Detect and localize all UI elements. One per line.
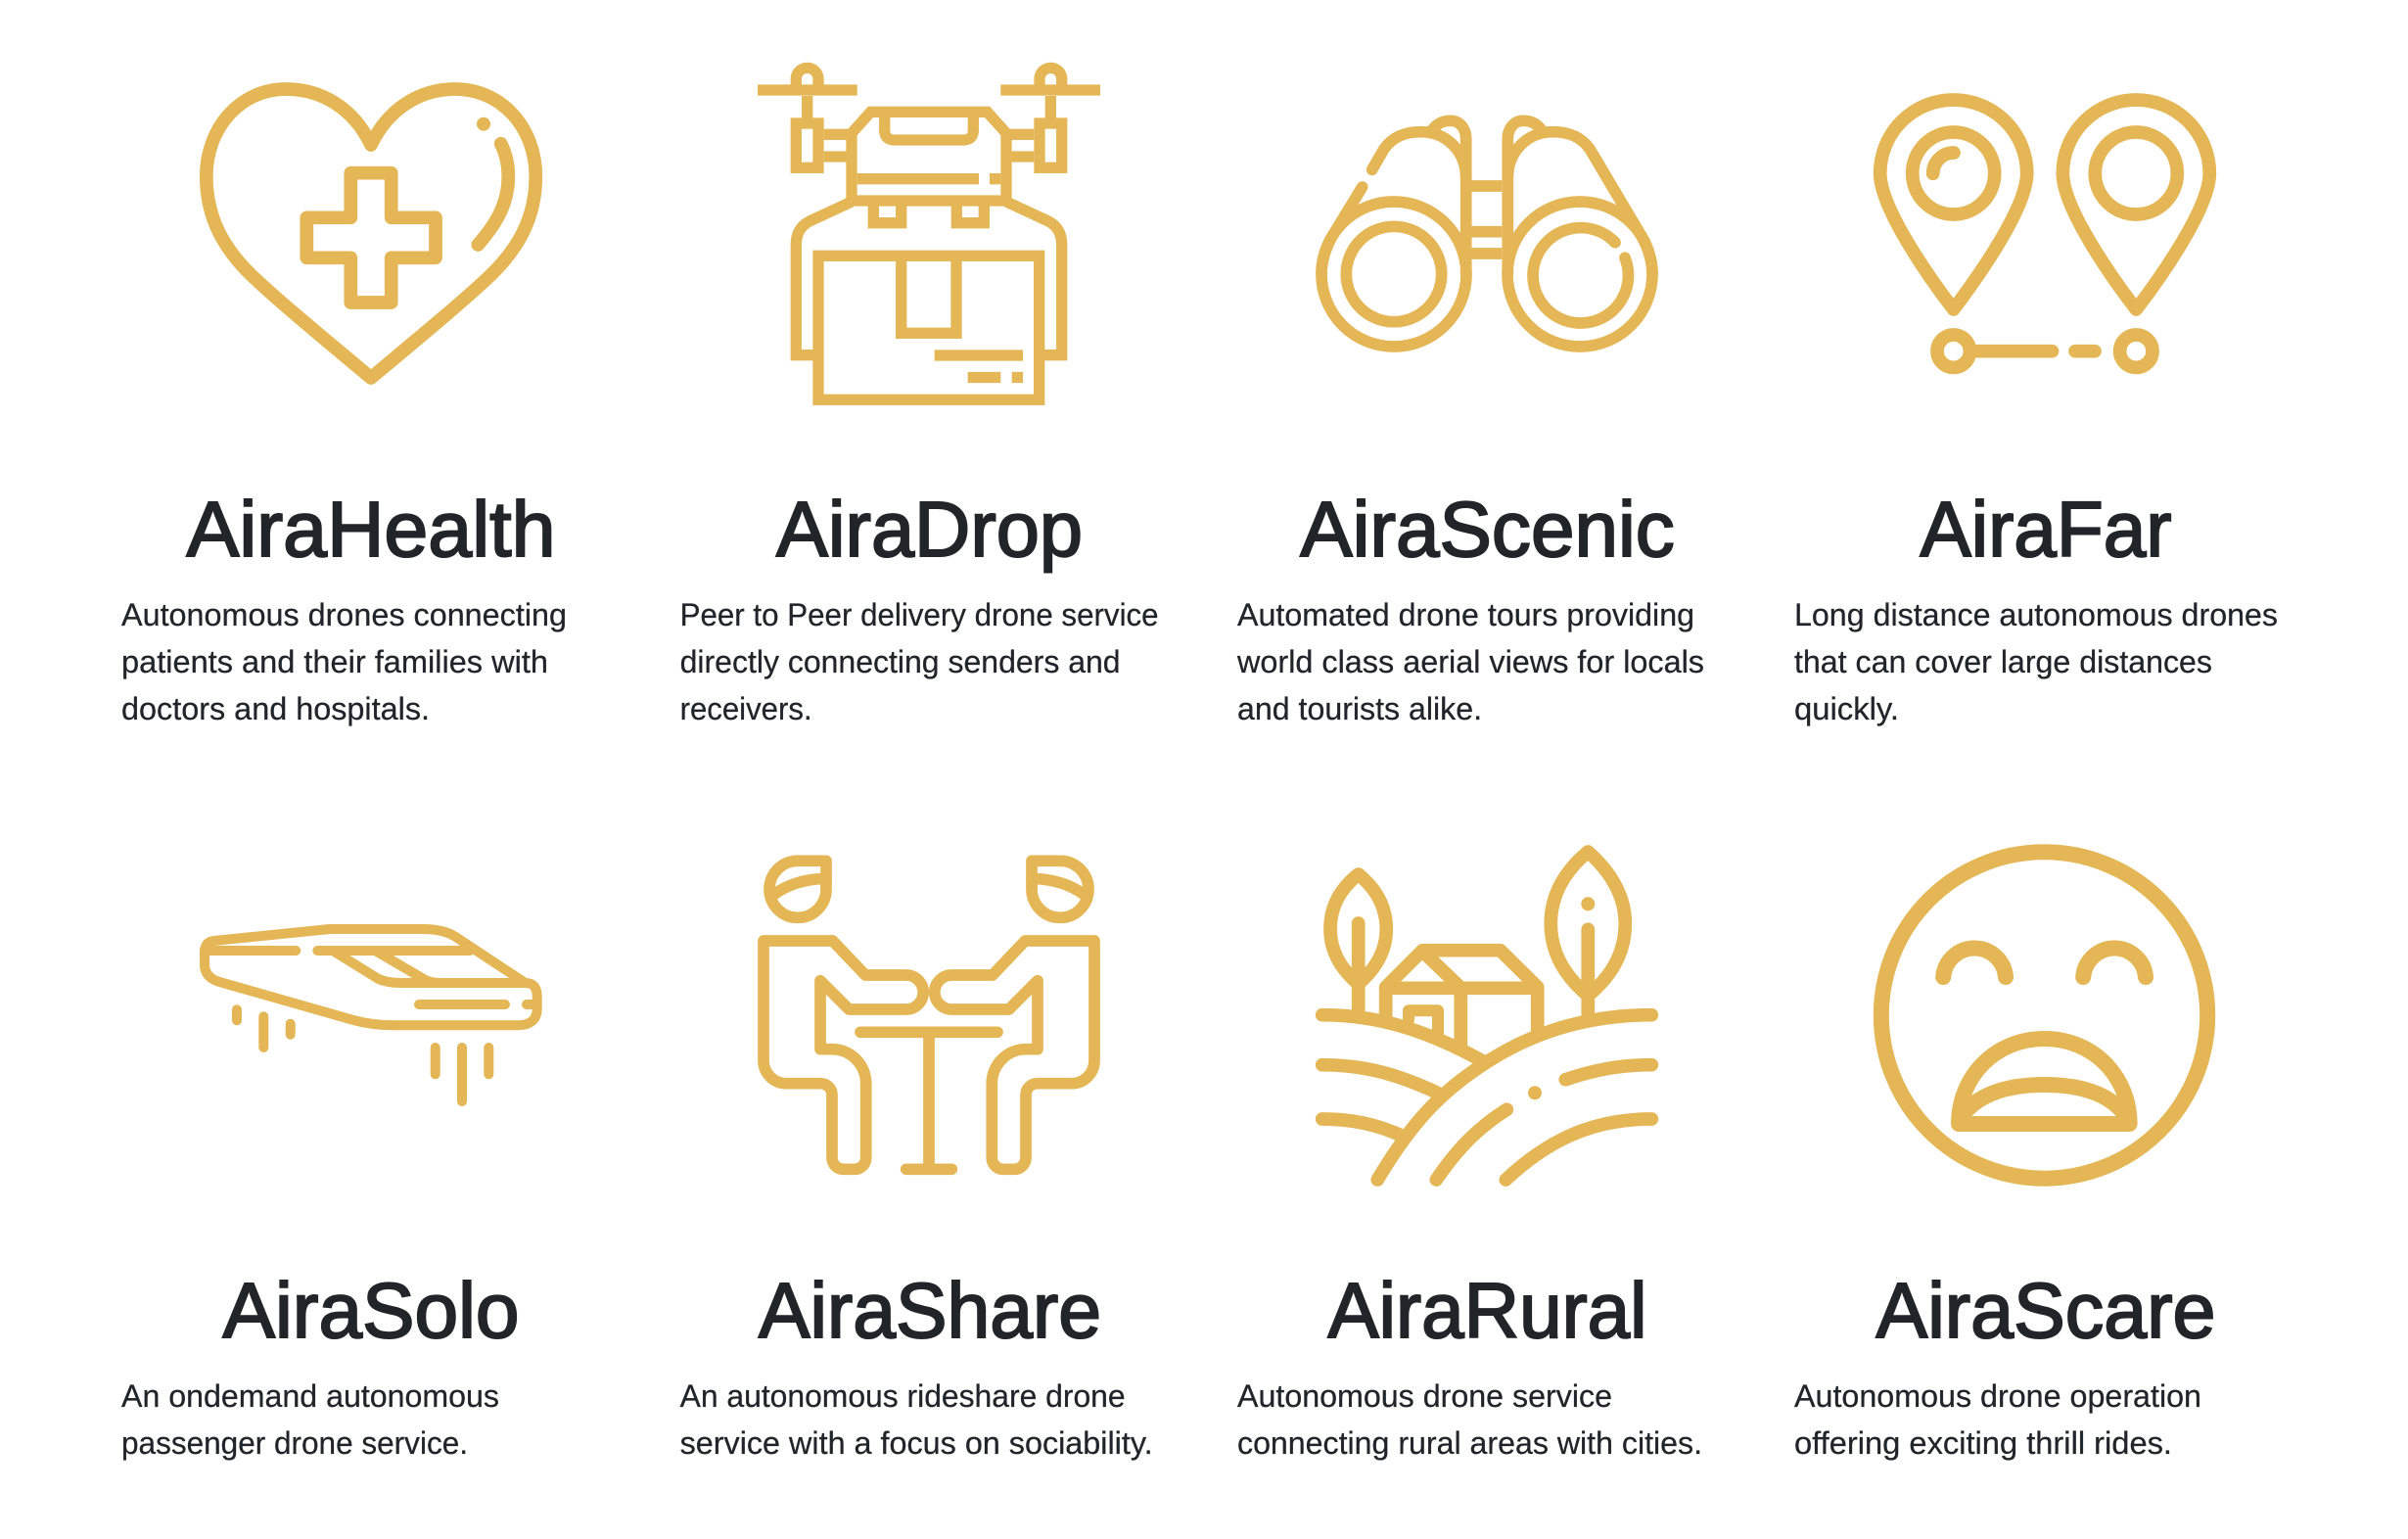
description: AiraRural	[1237, 1378, 1702, 1461]
icon: delivery drone with parcel	[758, 68, 1100, 399]
heading: AiraRural: AiraRural	[1327, 1267, 1646, 1354]
heading: AiraSolo: AiraSolo	[223, 1267, 519, 1354]
description: AiraScare	[1794, 1378, 2201, 1461]
card: AiraScenic	[1236, 120, 1704, 726]
icon: scared face	[1881, 852, 2207, 1179]
description: AiraHealth: patients and their families with	[121, 644, 548, 679]
description: AiraScenic: Automated drone tours providing	[1237, 597, 1694, 632]
heading: AiraHealth: AiraHealth	[186, 486, 556, 573]
description: AiraShare	[680, 1378, 1153, 1461]
heading: AiraScare: AiraScare	[1875, 1267, 2216, 1354]
description: AiraFar	[1794, 597, 2278, 726]
icon: two map pins and route	[1880, 100, 2209, 367]
description: AiraScenic	[1236, 597, 1704, 726]
description: AiraHealth: doctors and hospitals.	[121, 691, 430, 726]
icon: farmhouse, trees and fields	[1322, 852, 1651, 1180]
card: AiraFar	[1794, 100, 2278, 726]
description: AiraScenic: world class aerial views for locals	[1236, 644, 1704, 679]
heading: AiraScenic: AiraScenic	[1300, 486, 1675, 573]
description: AiraSolo: passenger drone service.	[121, 1425, 468, 1461]
description: AiraScenic: and tourists alike.	[1237, 691, 1482, 726]
description: AiraDrop: receivers.	[680, 691, 812, 726]
heading: AiraDrop: AiraDrop	[776, 486, 1083, 573]
heading: AiraShare: AiraShare	[759, 1267, 1101, 1354]
description: AiraRural: Autonomous drone service	[1237, 1378, 1612, 1414]
icon: heart with medical cross	[207, 89, 535, 378]
card: AiraScare	[1794, 852, 2216, 1461]
heading: AiraFar: AiraFar	[1921, 486, 2171, 573]
card: AiraDrop	[680, 68, 1159, 726]
description: AiraDrop: Peer to Peer delivery drone service	[680, 597, 1159, 632]
description: AiraHealth	[121, 597, 567, 726]
card: AiraHealth	[121, 89, 567, 726]
description: AiraFar: Long distance autonomous drones	[1794, 597, 2278, 632]
description: AiraShare: service with a focus on sociability.	[680, 1425, 1153, 1461]
description: AiraDrop	[680, 597, 1159, 726]
description: AiraScare: offering exciting thrill rides.	[1794, 1425, 2172, 1461]
description: AiraFar: quickly.	[1794, 691, 1899, 726]
description: AiraFar: that can cover large distances	[1794, 644, 2212, 679]
icon: two people sharing a table	[764, 861, 1094, 1169]
card: AiraSolo	[121, 929, 537, 1461]
description: AiraSolo: An ondemand autonomous	[121, 1378, 499, 1414]
description: AiraDrop: directly connecting senders and	[680, 644, 1121, 679]
description: AiraHealth: Autonomous drones connecting	[121, 597, 567, 632]
description: AiraRural: connecting rural areas with cities.	[1237, 1425, 1702, 1461]
description: AiraScare: Autonomous drone operation	[1794, 1378, 2201, 1414]
description: AiraSolo	[121, 1378, 499, 1461]
card: AiraShare	[680, 861, 1153, 1461]
icon: hovering passenger drone	[205, 929, 537, 1101]
icon: binoculars	[1321, 120, 1652, 347]
card: AiraRural	[1237, 852, 1702, 1461]
description: AiraShare: An autonomous rideshare drone	[680, 1378, 1126, 1414]
